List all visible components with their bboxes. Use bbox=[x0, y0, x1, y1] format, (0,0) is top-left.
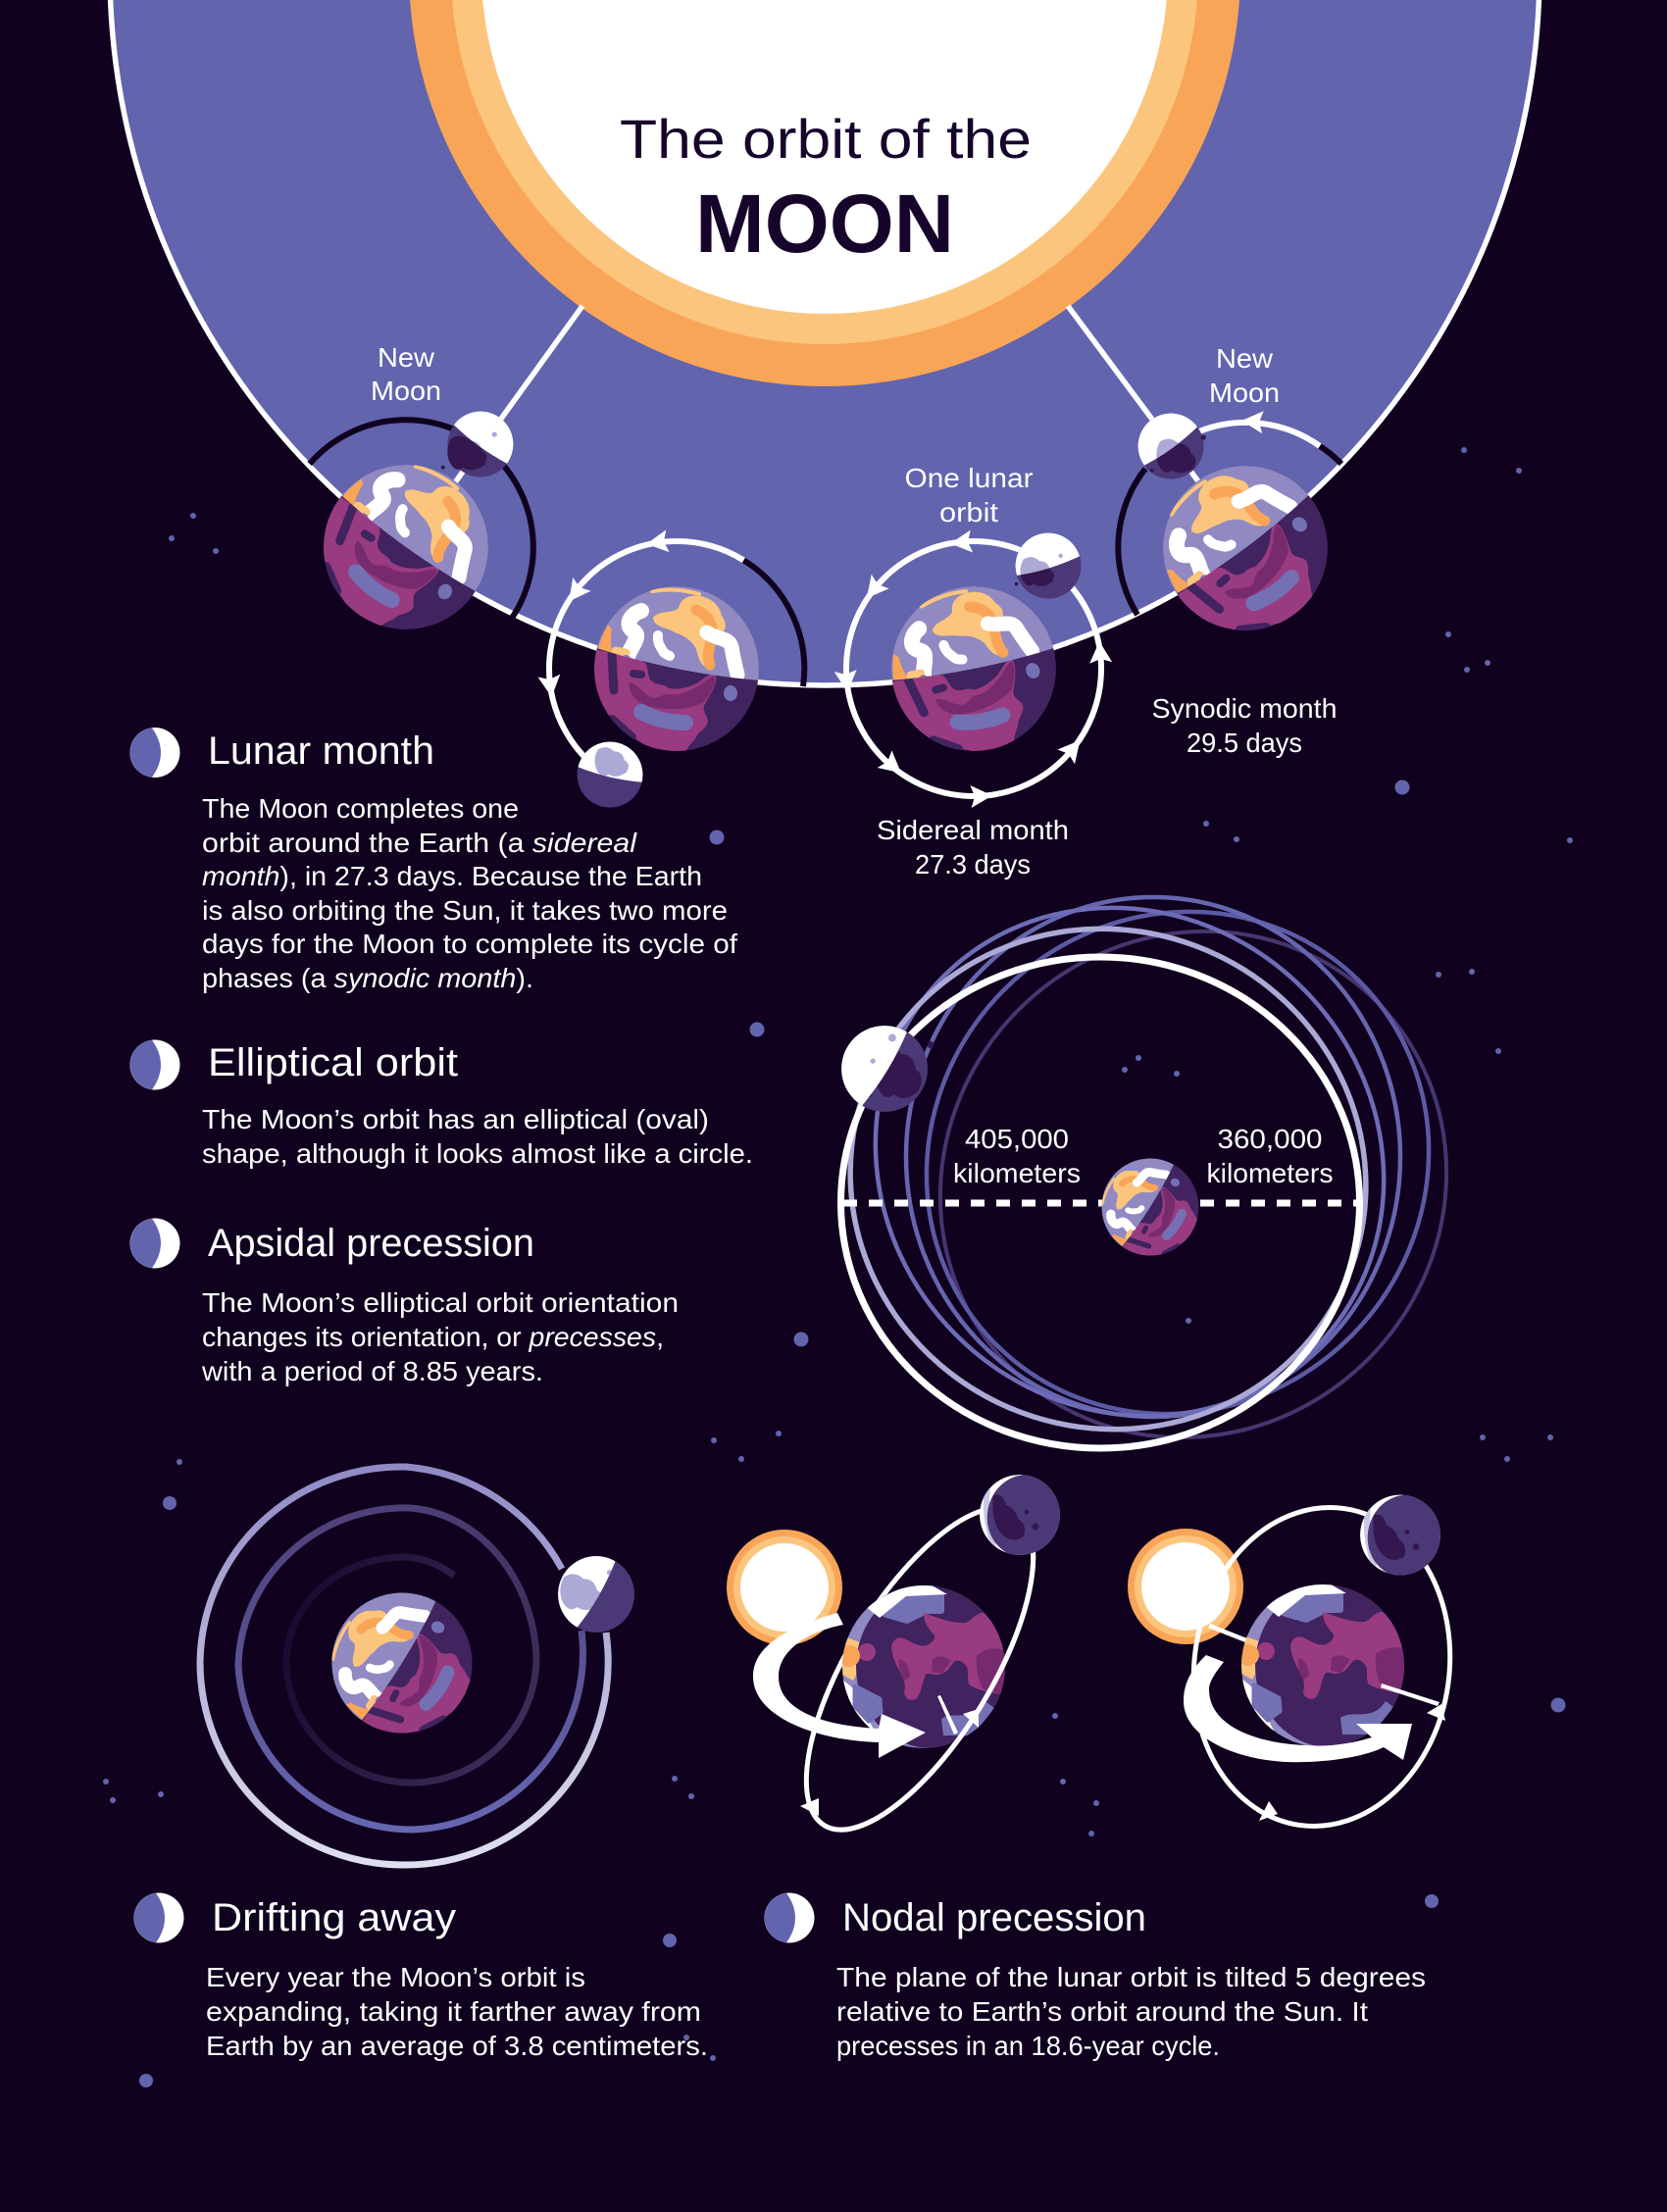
section: nodal precession: Nodal precession bbox=[842, 1896, 1146, 1939]
section: elliptical orbit: shape, although it looks almost like a circle. bbox=[202, 1138, 753, 1169]
section: elliptical orbit: Elliptical orbit bbox=[208, 1041, 458, 1084]
orbit labels: 27.3 days bbox=[915, 849, 1031, 880]
title bbox=[620, 108, 1032, 270]
sidereal position: earth and moon after one lunar orbit bbox=[834, 515, 1112, 808]
icon: nodal precession moon bbox=[765, 1892, 814, 1943]
section: elliptical orbit: The Moon’s orbit has an elliptical (oval) bbox=[202, 1104, 709, 1134]
section: lunar month: days for the Moon to complete its cycle of bbox=[202, 929, 737, 959]
orbit labels: One lunar bbox=[904, 463, 1034, 493]
section: nodal precession: relative to Earth’s orbit around the Sun. It bbox=[836, 1996, 1368, 2027]
section: lunar month: month), in 27.3 days. Because the Earth bbox=[202, 861, 702, 891]
moon on spiral bbox=[558, 1556, 634, 1633]
section: lunar month: orbit around the Earth (a sidereal bbox=[202, 828, 637, 858]
icon: elliptical orbit moon bbox=[129, 1039, 180, 1090]
orbit labels: New bbox=[1216, 343, 1274, 374]
planet bbox=[838, 1579, 1007, 1748]
section: elliptical orbit bbox=[129, 1039, 753, 1169]
moon bbox=[441, 412, 514, 477]
moon bbox=[1360, 1494, 1440, 1575]
synodic position 4: earth and moon back at new moon bbox=[1115, 411, 1343, 630]
section: drifting away bbox=[133, 1892, 708, 2061]
orbit labels: orbit bbox=[939, 497, 998, 528]
moon bbox=[1137, 414, 1206, 478]
orbit labels: New bbox=[378, 342, 435, 373]
diagram: nodal precession right bbox=[1128, 1494, 1453, 1829]
section: apsidal precession bbox=[129, 1218, 679, 1386]
section: nodal precession: precesses in an 18.6-year cycle. bbox=[836, 2031, 1220, 2061]
distance labels: kilometers bbox=[953, 1158, 1081, 1188]
section: apsidal precession: The Moon’s elliptical orbit orientation bbox=[202, 1287, 679, 1318]
orbit labels: 29.5 days bbox=[1187, 728, 1302, 758]
orbit labels: Moon bbox=[371, 376, 441, 406]
section: drifting away: Drifting away bbox=[212, 1896, 456, 1939]
section: lunar month: The Moon completes one bbox=[202, 793, 519, 824]
orbit labels: Synodic month bbox=[1151, 693, 1338, 724]
orbit labels: Sidereal month bbox=[877, 815, 1069, 845]
planet bbox=[1238, 1578, 1406, 1747]
moon bbox=[1014, 533, 1081, 598]
sun bbox=[1128, 1529, 1243, 1644]
icon: apsidal precession moon bbox=[129, 1218, 180, 1269]
section: drifting away: Every year the Moon’s orbit is bbox=[206, 1962, 585, 1992]
new moon guide lines bbox=[453, 306, 1201, 485]
diagram: moon drifting away spiral bbox=[200, 1467, 668, 1865]
section: lunar month: Lunar month bbox=[208, 729, 434, 773]
background stars bbox=[103, 447, 1573, 2087]
orbit labels: Moon bbox=[1209, 377, 1280, 408]
section: lunar month bbox=[129, 728, 737, 993]
icon: lunar month moon bbox=[129, 728, 180, 778]
distance labels: 405,000 bbox=[965, 1124, 1069, 1154]
synodic position 1: earth and moon at new moon bbox=[308, 412, 536, 629]
diagram: apsidal precession orbits bbox=[837, 894, 1449, 1451]
section: drifting away: expanding, taking it farther away from bbox=[206, 1996, 701, 2027]
distance labels: kilometers bbox=[1206, 1158, 1334, 1188]
orbit labels bbox=[371, 342, 1338, 880]
section: nodal precession bbox=[765, 1892, 1426, 2061]
icon: drifting away moon bbox=[133, 1892, 184, 1943]
section: drifting away: Earth by an average of 3.8 centimeters. bbox=[206, 2031, 708, 2061]
section: lunar month: is also orbiting the Sun, it takes two more bbox=[202, 895, 728, 926]
section: nodal precession: The plane of the lunar orbit is tilted 5 degrees bbox=[836, 1962, 1426, 1992]
title: MOON bbox=[695, 177, 954, 270]
distance labels: 360,000 bbox=[1218, 1124, 1322, 1154]
moon on orbit bbox=[841, 1026, 934, 1112]
distance labels bbox=[953, 1124, 1334, 1188]
sun bbox=[727, 1530, 842, 1645]
section: apsidal precession: with a period of 8.85 years. bbox=[201, 1356, 543, 1386]
big orbit disc around the sun bbox=[110, 0, 1540, 685]
diagram: nodal precession left bbox=[727, 1475, 1060, 1833]
earth at spiral centre bbox=[311, 1573, 492, 1755]
big rotation arrow bbox=[1184, 1655, 1412, 1762]
moon bbox=[980, 1475, 1060, 1555]
big rotation arrow bbox=[753, 1613, 926, 1758]
earth at orbit centre bbox=[1087, 1144, 1213, 1271]
section: lunar month: phases (a synodic month). bbox=[202, 963, 533, 993]
sun bbox=[409, 0, 1240, 386]
section: apsidal precession: changes its orientation, or precesses, bbox=[202, 1322, 664, 1352]
synodic position 2: earth and moon after part of orbit bbox=[537, 529, 804, 823]
section: apsidal precession: Apsidal precession bbox=[208, 1222, 534, 1265]
moon bbox=[577, 741, 643, 808]
title: The orbit of the bbox=[620, 108, 1032, 170]
